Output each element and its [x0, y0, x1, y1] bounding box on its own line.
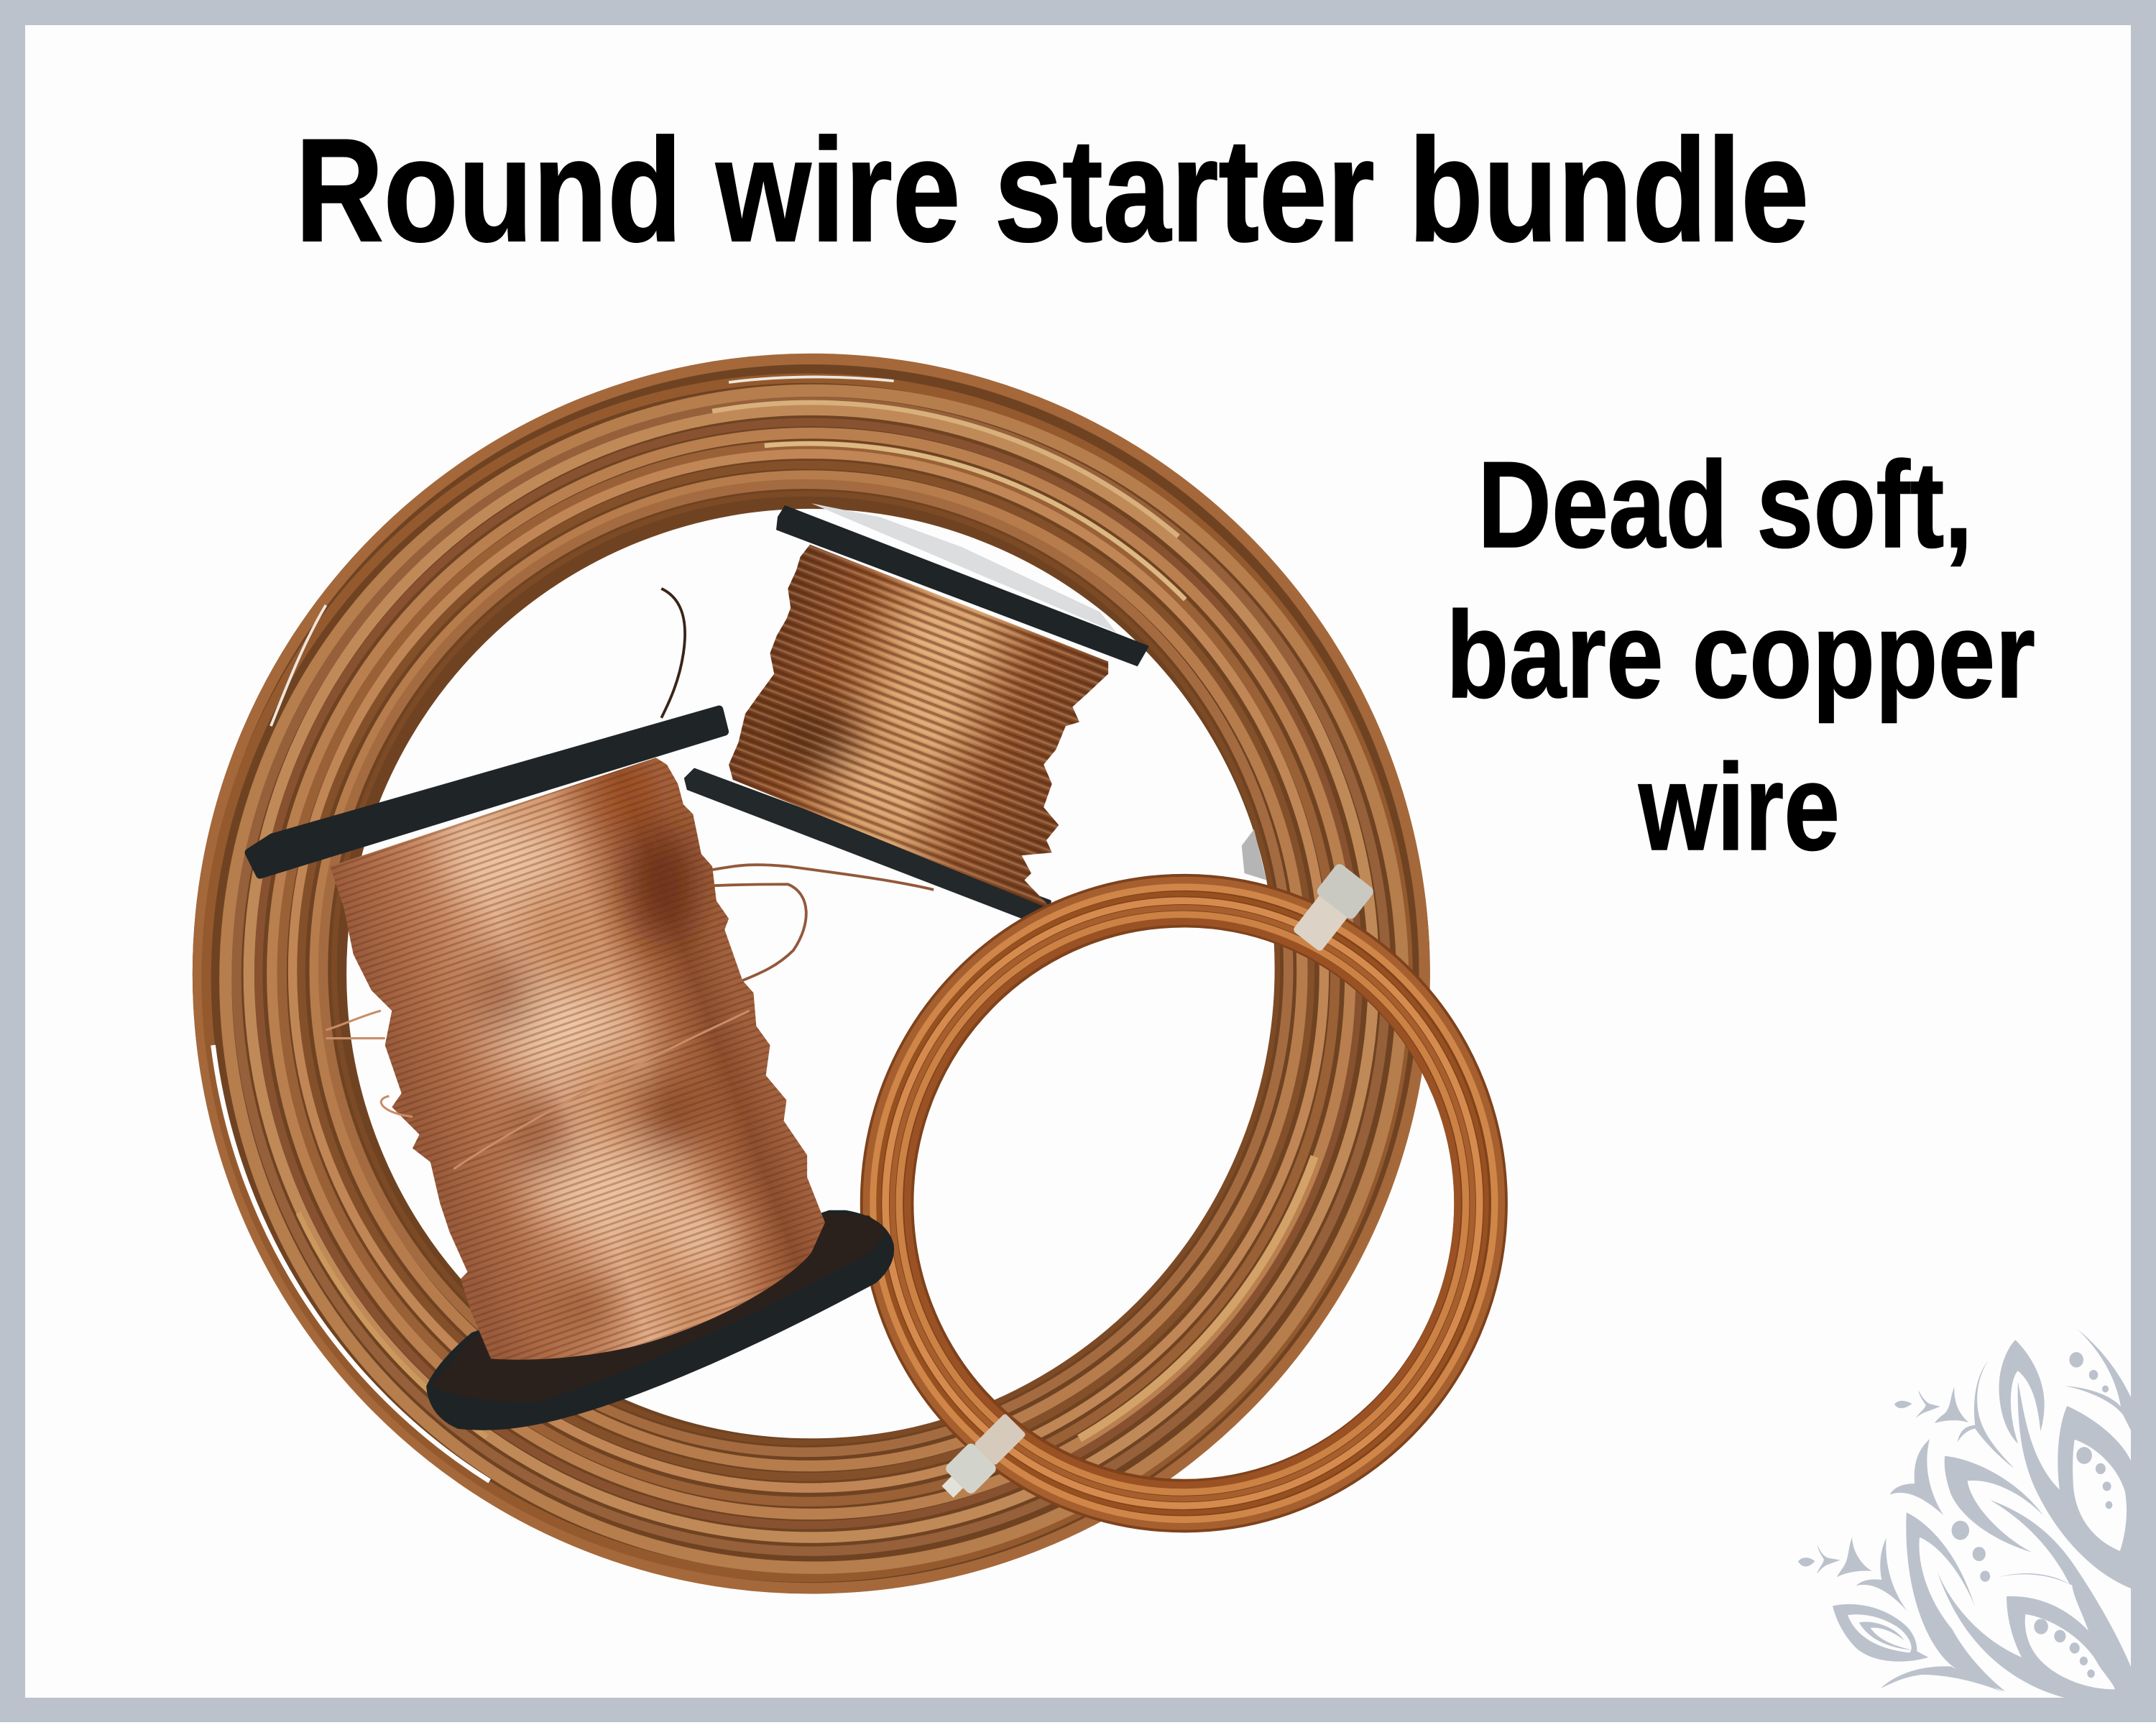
title: Round wire starter bundle	[295, 109, 1809, 272]
large square copper coil	[198, 359, 1424, 1588]
small spool highlights	[765, 603, 999, 818]
big spool loose wire	[326, 1011, 750, 1169]
ornament long band and lower right leaf	[1938, 1500, 2132, 1698]
big spool light and shadow patches	[448, 763, 738, 1330]
sprigs lower	[1798, 1537, 1871, 1577]
small spool winding lines	[729, 545, 1108, 911]
small spool flange reflection	[811, 503, 1117, 632]
small spool	[685, 503, 1148, 920]
ornament upper branch	[1958, 1361, 2014, 1468]
big spool winding lines	[330, 758, 825, 1360]
small spool bottom flange	[685, 769, 1051, 920]
big spool wire body	[330, 758, 825, 1360]
ornament lower branch	[1856, 1538, 1907, 1611]
product photo: wire coils and spools	[198, 359, 1501, 1588]
big spool flange top surface	[430, 1213, 887, 1403]
big spool	[249, 709, 894, 1430]
ornament mid branch	[1890, 1439, 1943, 1515]
ornament dots	[1952, 1352, 2112, 1678]
stray copper wires	[581, 865, 934, 980]
caption line 1: Dead soft,	[1478, 436, 1973, 574]
stray black wire	[661, 589, 685, 718]
cable tie: bottom	[934, 1410, 1029, 1506]
caption line 3: wire	[1638, 739, 1840, 876]
shadow under small coil	[1242, 829, 1266, 880]
sprigs upper	[1894, 1386, 1968, 1423]
ornament bottom swoosh	[1881, 1666, 2004, 1693]
ornament lower left leaf	[1833, 1604, 1928, 1662]
icon: corner floral ornament	[1798, 1329, 2132, 1698]
big spool bottom flange	[426, 1210, 894, 1430]
side caption	[1446, 436, 2035, 876]
small round copper coil	[866, 880, 1501, 1527]
small spool wire body	[729, 545, 1108, 911]
ornament left leaf	[1906, 1512, 2005, 1691]
small spool top flange	[777, 506, 1148, 666]
golden highlights on large coil	[298, 402, 1314, 1438]
gaps between outer strands	[213, 377, 894, 1481]
big spool top flange	[249, 709, 724, 875]
ornament center leaf	[1945, 1456, 2043, 1552]
caption line 2: bare copper	[1446, 586, 2035, 724]
cable tie: top	[1288, 862, 1376, 956]
ornament top crescents	[2065, 1329, 2132, 1431]
ornament top leaf	[1999, 1340, 2045, 1444]
ornament right leaf	[2018, 1381, 2132, 1588]
ornament inner curl	[1859, 1622, 1912, 1650]
